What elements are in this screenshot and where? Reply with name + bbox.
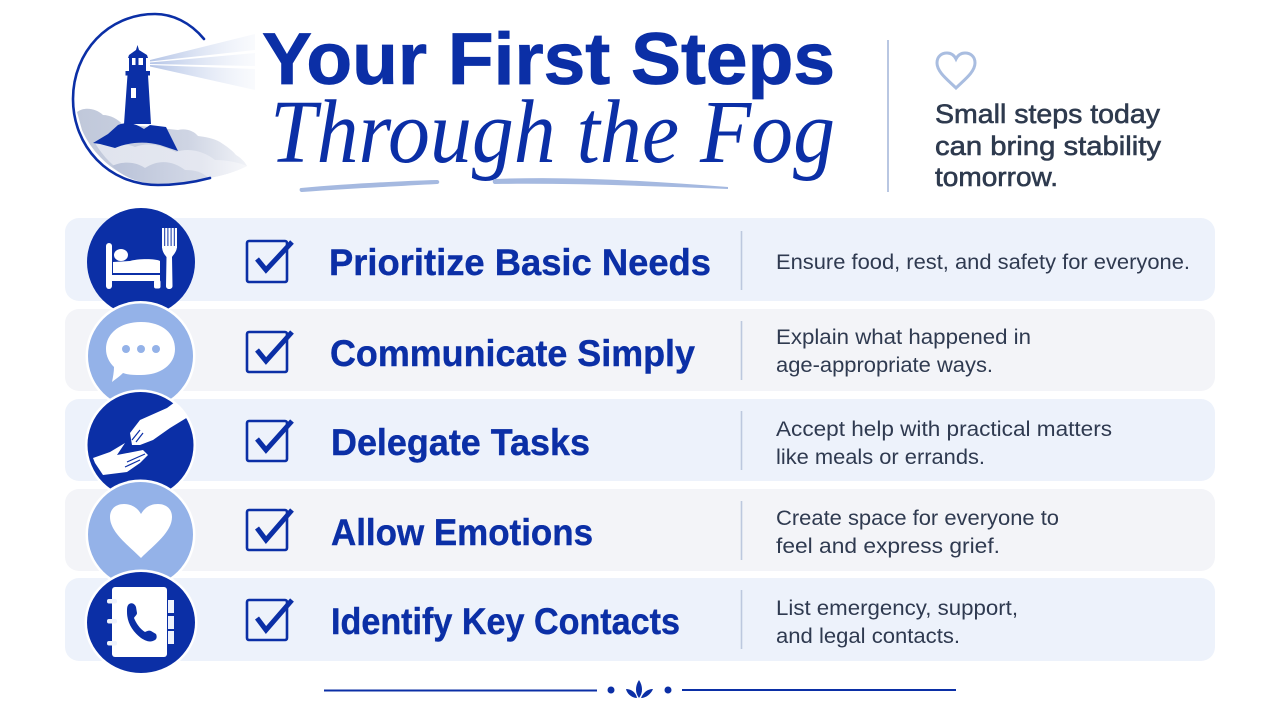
- icon: heart: [86, 480, 196, 590]
- description: [776, 325, 1031, 377]
- panel: row 4 allow emotions: [65, 489, 1215, 571]
- text block: tagline: [935, 99, 1162, 192]
- panel: header logo lighthouse: [73, 14, 255, 185]
- description: and legal contacts.: [776, 624, 960, 648]
- divider: header: [887, 40, 889, 192]
- checkbox: [247, 600, 292, 640]
- heading: Prioritize Basic Needs: [329, 242, 711, 283]
- description: [776, 596, 1018, 648]
- checkbox: [247, 510, 292, 550]
- icon: lighthouse tower: [124, 45, 151, 124]
- heading: Communicate Simply: [330, 333, 695, 374]
- description: age-appropriate ways.: [776, 353, 993, 377]
- decorative underline strokes: [300, 178, 728, 192]
- heading: Delegate Tasks: [331, 422, 590, 463]
- icon: rock: [93, 123, 178, 151]
- heading: Allow Emotions: [331, 512, 593, 553]
- description: Create space for everyone to: [776, 506, 1059, 530]
- icon: fog clouds: [77, 109, 247, 184]
- checkbox: [247, 241, 292, 282]
- footer ornament: [324, 680, 956, 698]
- checkbox: [247, 421, 292, 461]
- panel: row 2 communicate simply: [65, 309, 1215, 391]
- description: feel and express grief.: [776, 534, 1000, 558]
- text block: tagline: can bring stability: [935, 131, 1162, 161]
- icon: light beams: [150, 34, 255, 90]
- heading: Identify Key Contacts: [331, 601, 680, 642]
- description: Ensure food, rest, and safety for everyone.: [776, 250, 1190, 274]
- icon: address book with phone: [84, 570, 198, 676]
- icon: circle arc: [73, 14, 210, 185]
- icon: outline heart: [937, 53, 975, 88]
- description: List emergency, support,: [776, 596, 1018, 620]
- panel: row 1 prioritize basic needs: [65, 218, 1215, 301]
- text block: tagline: tomorrow.: [935, 162, 1058, 192]
- text block: tagline: Small steps today: [935, 99, 1161, 129]
- description: Explain what happened in: [776, 325, 1031, 349]
- icon: speech bubble: [86, 301, 196, 411]
- description: [776, 417, 1112, 469]
- panel: row 5 identify key contacts: [65, 578, 1215, 661]
- panel: row 3 delegate tasks: [65, 399, 1215, 481]
- icon: helping hands: [85, 390, 196, 500]
- icon: bed and fork: [87, 208, 195, 316]
- description: Accept help with practical matters: [776, 417, 1112, 441]
- title: Your First Steps: Your First Steps: [262, 19, 835, 100]
- description: [776, 506, 1059, 558]
- checkbox: [247, 332, 292, 372]
- description: like meals or errands.: [776, 445, 985, 469]
- subtitle: Through the Fog: Through the Fog: [270, 83, 835, 182]
